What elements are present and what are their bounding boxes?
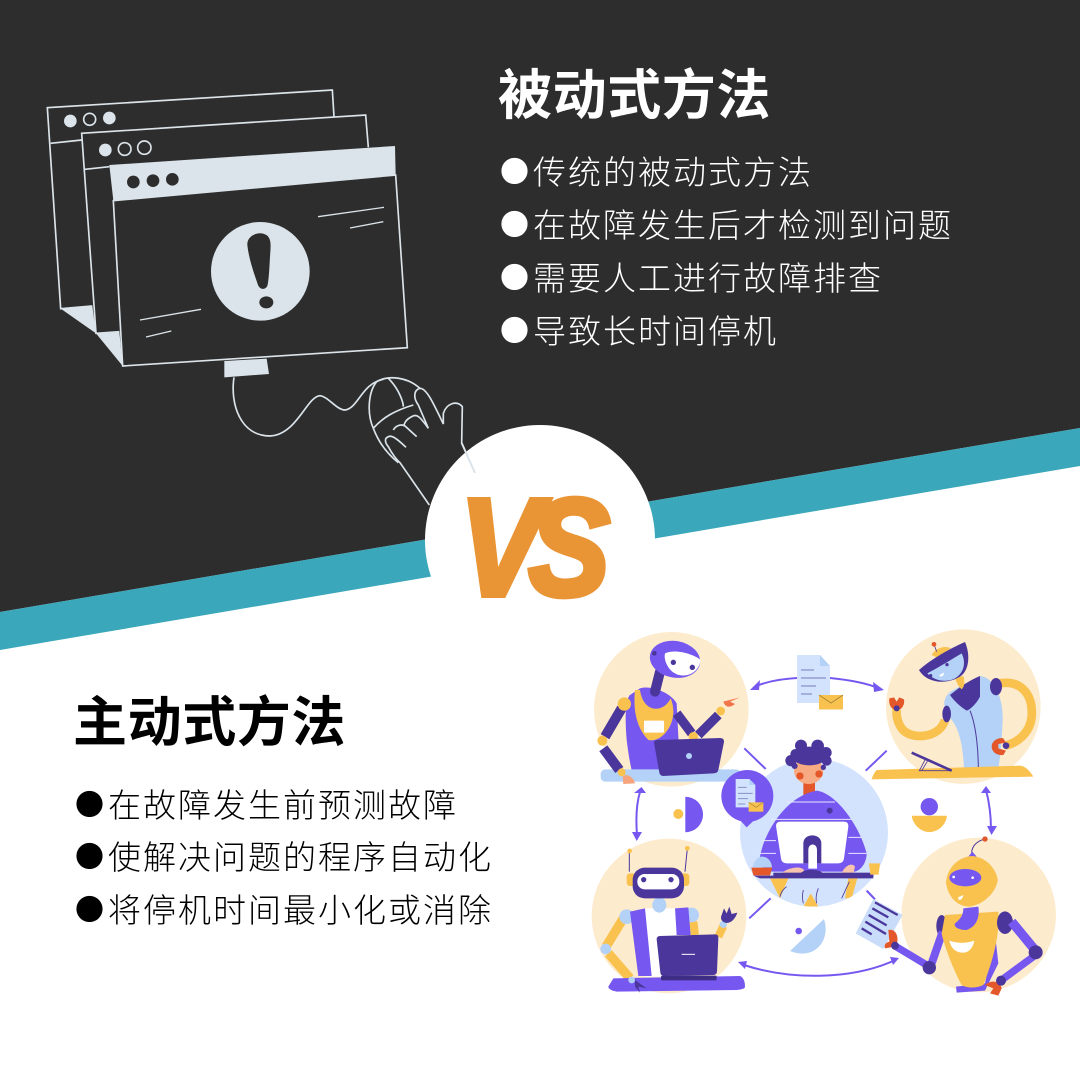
list: proactive points: ● (75, 834, 108, 876)
panel: dark top background (0, 0, 1080, 612)
heading: proactive: 主动式方法 (73, 678, 346, 757)
list: reactive points: ● (500, 149, 533, 191)
connecting arrows (632, 678, 997, 976)
small shapes (673, 797, 947, 954)
VS badge (425, 425, 655, 655)
list: reactive points: ● (500, 202, 533, 244)
icon: exclamation alert (211, 222, 310, 321)
list: reactive points: 需要人工进行故障排查 (533, 252, 883, 300)
mouse (369, 378, 420, 463)
document and envelope icon (797, 655, 843, 710)
robot: bottom left (592, 839, 746, 993)
front window (109, 146, 407, 366)
robot: bottom right (856, 836, 1056, 996)
robot: top right (872, 629, 1041, 784)
VS text: VS (460, 470, 609, 625)
list: reactive points: 传统的被动式方法 (533, 146, 813, 194)
illustration: robots around a person (592, 629, 1056, 996)
robot: top left (594, 632, 749, 787)
heading: reactive: 被动式方法 (498, 51, 771, 130)
list: reactive points: 在故障发生后才检测到问题 (533, 199, 953, 247)
list: reactive points: 导致长时间停机 (533, 305, 778, 353)
list: proactive points: 将停机时间最小化或消除 (108, 884, 493, 932)
teal diagonal band (0, 428, 1080, 650)
list: proactive points: ● (75, 782, 108, 824)
middle window (82, 115, 368, 366)
list: reactive points (500, 146, 953, 353)
list: reactive points: ● (500, 255, 533, 297)
illustration: browser windows with alert and mouse (47, 90, 462, 505)
list: proactive points (75, 779, 493, 932)
hand (385, 388, 462, 505)
monitor connector (224, 359, 269, 377)
person at computer (721, 740, 888, 907)
list: proactive points: ● (75, 887, 108, 929)
chat bubble (721, 770, 773, 827)
list: reactive points: ● (500, 308, 533, 350)
list: proactive points: 使解决问题的程序自动化 (108, 831, 493, 879)
list: proactive points: 在故障发生前预测故障 (108, 779, 458, 827)
mouse cable (233, 377, 383, 436)
back window (47, 90, 334, 333)
